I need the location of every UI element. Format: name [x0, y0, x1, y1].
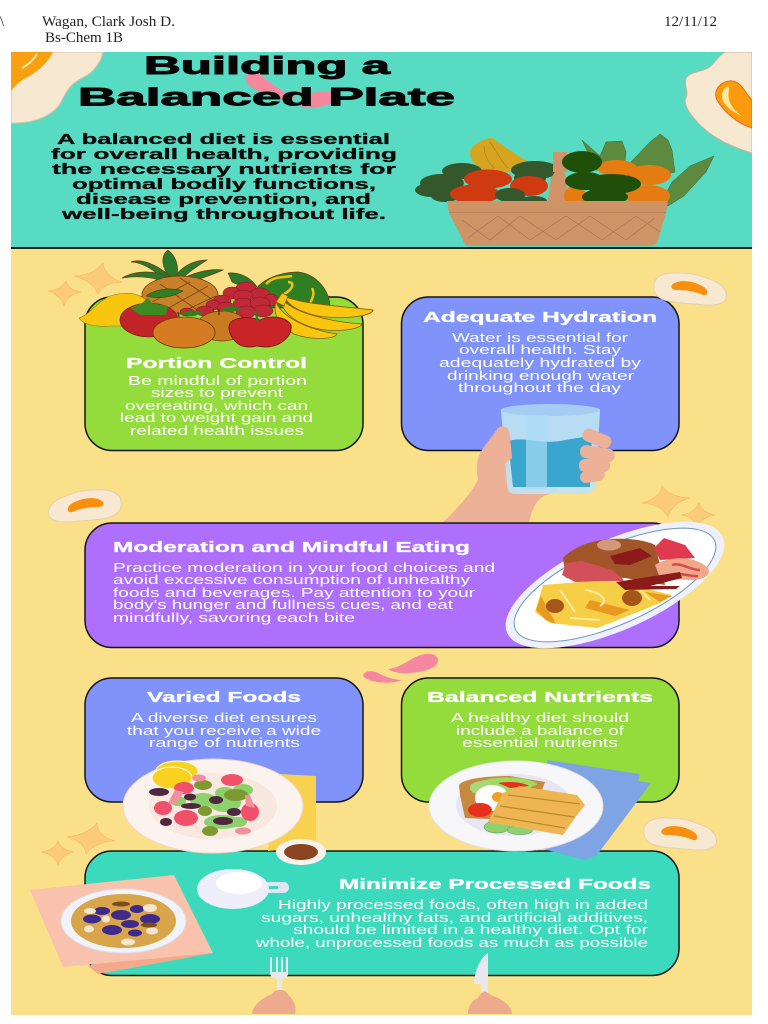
panel: yellow body background — [11, 247, 752, 1015]
panel: minimize processed foods — [85, 851, 679, 976]
text: moderation body: mindfully, savoring each bite — [113, 611, 355, 625]
intro text: the necessary nutrients for — [52, 162, 397, 178]
text: moderation body: Practice moderation in your food choices and — [113, 561, 495, 575]
text: balanced nutrients body: essential nutrients — [462, 736, 618, 750]
icon: hand holding fork — [252, 957, 296, 1014]
title — [80, 56, 454, 106]
text: varied foods body: range of nutrients — [149, 736, 300, 750]
text: balanced nutrients body: include a balance of — [456, 724, 625, 738]
text: portion control body: overeating, which can — [125, 399, 308, 413]
text: portion control body: sizes to prevent — [151, 386, 284, 400]
text: minimize body: whole, unprocessed foods as much as possible — [255, 936, 648, 950]
icon: white cup — [197, 869, 289, 909]
text: minimize body — [255, 898, 648, 950]
icon: small egg lower right — [644, 818, 716, 850]
panel: moderation and mindful eating — [85, 523, 679, 648]
heading: minimize processed foods: Minimize Processed Foods — [339, 876, 651, 893]
text: adequate hydration body: throughout the day — [458, 381, 622, 395]
icon: oatmeal bowl on napkin — [30, 875, 213, 974]
text: moderation body: foods and beverages. Pay attention to your — [113, 586, 475, 600]
icon: toast plate with blue napkin — [429, 760, 651, 860]
icon: top-right fried egg — [685, 52, 752, 153]
decoration: pink splash — [363, 654, 438, 683]
panel: adequate hydration — [402, 297, 679, 450]
text: portion control body — [120, 374, 313, 438]
text: minimize body: sugars, unhealthy fats, and artificial additives, — [261, 911, 648, 925]
panel: portion control — [85, 297, 363, 450]
heading: portion control: Portion Control — [126, 355, 307, 372]
icon: plate of meat and pasta — [506, 522, 724, 648]
intro text: for overall health, providing — [51, 147, 397, 163]
text: minimize body: should be limited in a healthy diet. Opt for — [293, 923, 648, 937]
text: varied foods body: A diverse diet ensures — [131, 711, 317, 725]
heading: adequate hydration: Adequate Hydration — [423, 309, 657, 326]
icon: hand holding glass — [443, 404, 616, 522]
text: adequate hydration body: Water is essential for — [452, 331, 628, 345]
text: balanced nutrients body: A healthy diet should — [451, 711, 629, 725]
text: minimize body: Highly processed foods, often high in added — [278, 898, 648, 912]
intro text: well-being throughout life. — [60, 207, 386, 223]
heading: balanced nutrients: Balanced Nutrients — [427, 689, 653, 706]
intro text: optimal bodily functions, — [72, 177, 376, 193]
document header: \ — [0, 14, 5, 30]
text: varied foods body — [127, 711, 321, 750]
document header: 12/11/12 — [664, 14, 717, 30]
decoration: pink splash behind title — [246, 73, 331, 108]
text: portion control body: related health issues — [130, 424, 304, 438]
intro text: disease prevention, and — [76, 192, 371, 208]
text: adequate hydration body: drinking enough water — [447, 369, 634, 383]
document header: Bs-Chem 1B — [45, 30, 123, 46]
icon: hand holding knife — [468, 953, 512, 1014]
icon: sparkles upper left — [48, 263, 122, 306]
text: portion control body: lead to weight gain and — [120, 411, 313, 425]
text: portion control body: Be mindful of portion — [128, 374, 307, 388]
icon: fruit pile — [79, 250, 373, 348]
text: varied foods body: that you receive a wide — [127, 724, 321, 738]
icon: salad plate — [123, 759, 326, 865]
divider line — [11, 247, 752, 249]
heading: varied foods: Varied Foods — [147, 689, 301, 706]
intro text: A balanced diet is essential — [57, 132, 390, 148]
icon: vegetable basket — [415, 134, 714, 246]
panel: teal header background — [11, 52, 752, 247]
document header — [0, 14, 717, 46]
icon: small egg top right — [654, 273, 726, 305]
text: moderation body: body's hunger and fullness cues, and eat — [113, 598, 454, 612]
intro text — [51, 132, 397, 223]
text: balanced nutrients body — [451, 712, 628, 747]
text: adequate hydration body: overall health. Stay — [459, 343, 622, 357]
text: adequate hydration body: adequately hydrated by — [439, 356, 642, 370]
text: adequate hydration body — [439, 331, 642, 395]
title: Building a — [144, 52, 392, 80]
panel: varied foods — [85, 678, 363, 802]
icon: small egg left — [48, 490, 121, 522]
title: Balanced Plate — [78, 84, 455, 112]
text: moderation body: avoid excessive consumption of unhealthy — [113, 573, 471, 587]
icon: top-left fried egg — [11, 52, 103, 123]
panel: balanced nutrients — [402, 678, 679, 802]
document header: Wagan, Clark Josh D. — [42, 14, 175, 30]
text: moderation body — [113, 561, 495, 625]
icon: sparkles right — [642, 486, 716, 527]
icon: sparkles lower left — [41, 823, 115, 865]
heading: moderation: Moderation and Mindful Eating — [113, 539, 470, 556]
